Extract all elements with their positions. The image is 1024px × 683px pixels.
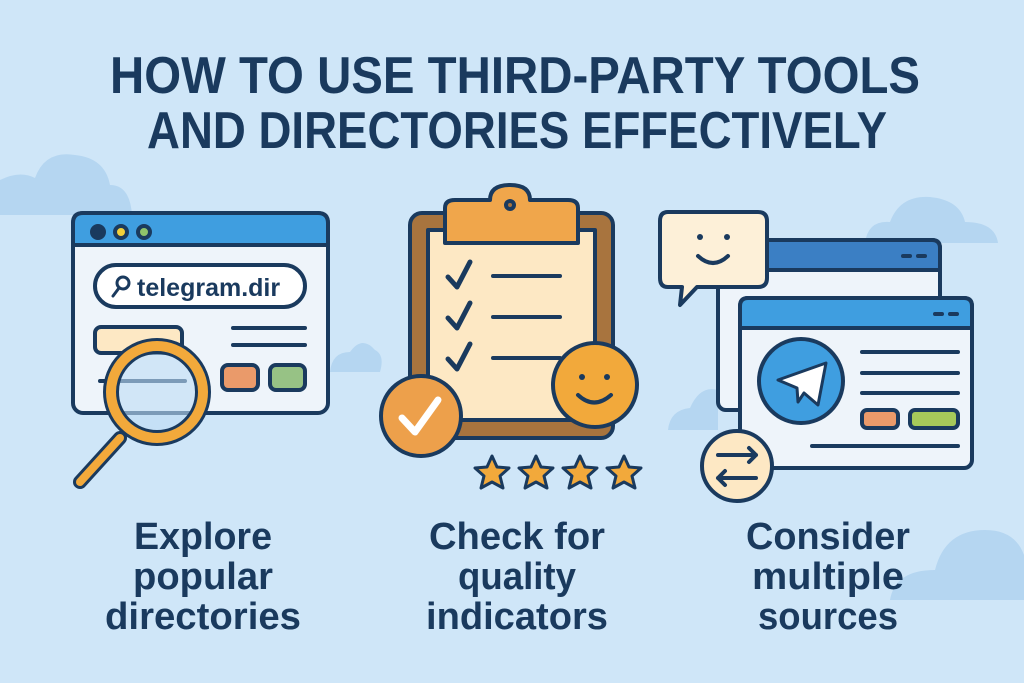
caption: check: quality <box>458 556 576 598</box>
caption: check <box>426 516 608 638</box>
icon: browser with search: telegram.dir <box>137 274 280 302</box>
caption: explore: directories <box>105 596 301 638</box>
title <box>110 47 920 160</box>
caption: explore: Explore <box>134 516 272 558</box>
caption: explore <box>105 516 301 638</box>
caption: explore: popular <box>133 556 273 598</box>
caption: consider: multiple <box>752 556 904 598</box>
caption: check: Check for <box>429 516 605 558</box>
caption: consider <box>746 516 910 638</box>
icon: multiple browser windows <box>660 212 972 501</box>
icon: clipboard with checks <box>381 185 641 488</box>
icon: browser with search <box>73 213 328 482</box>
caption: check: indicators <box>426 596 608 638</box>
title: AND DIRECTORIES EFFECTIVELY <box>147 102 887 160</box>
title: HOW TO USE THIRD-PARTY TOOLS <box>110 47 920 105</box>
caption: consider: Consider <box>746 516 910 558</box>
caption: consider: sources <box>758 596 898 638</box>
